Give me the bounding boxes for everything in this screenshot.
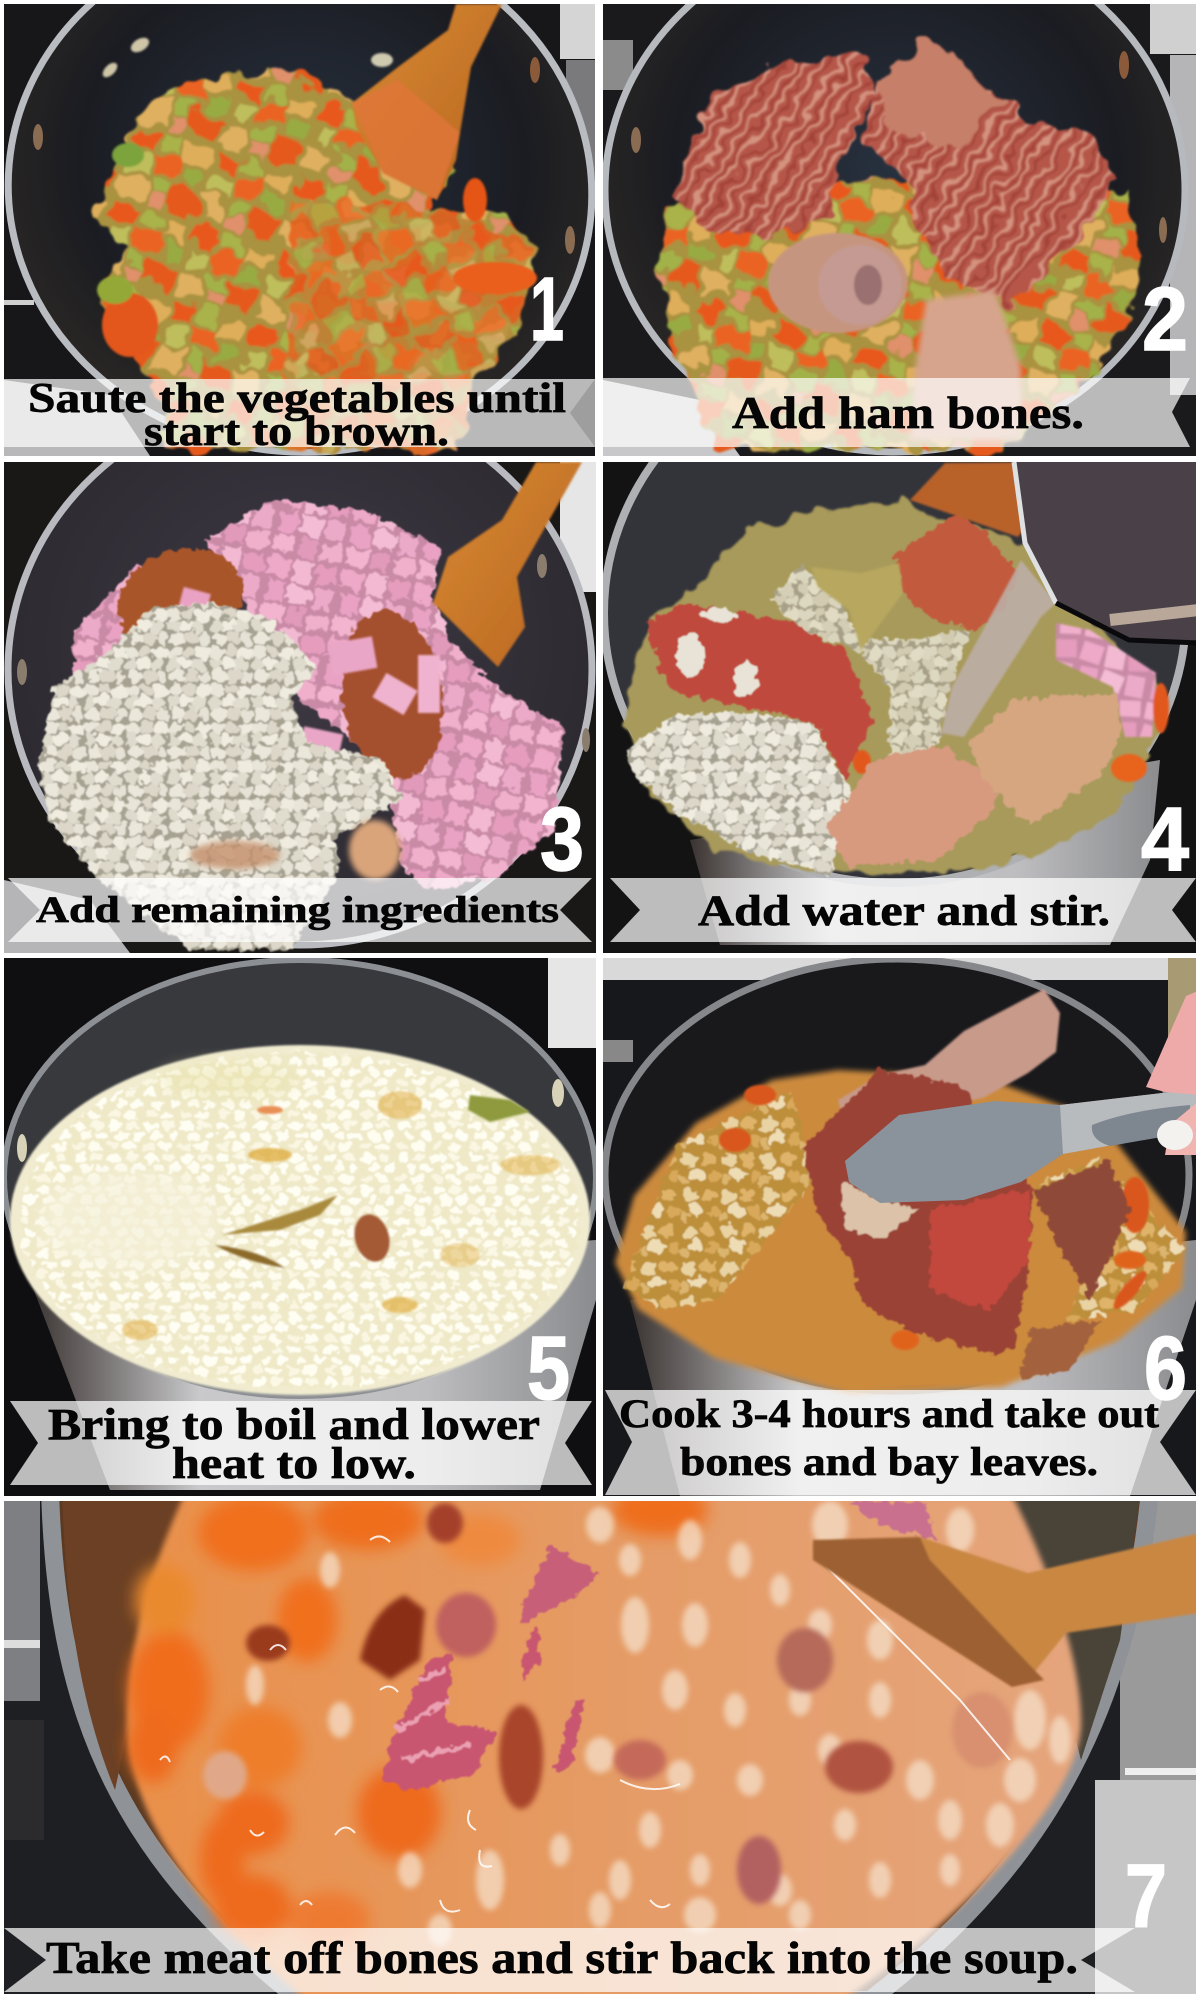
- caption text: Saute the vegetables until: [28, 376, 566, 422]
- food: right ham bone: [861, 38, 1115, 307]
- caption text: Cook 3-4 hours and take out: [619, 1391, 1160, 1436]
- pot: [605, 0, 1185, 452]
- icon: wooden spoon: [813, 1533, 1200, 1687]
- food: bone pieces: [190, 820, 401, 880]
- icon: wooden spoon: [433, 462, 582, 667]
- caption text: Add remaining ingredients: [36, 890, 559, 931]
- step number 7: 7: [1125, 1847, 1167, 1947]
- pot rivets: [17, 1079, 564, 1162]
- food: second trotter: [910, 290, 1021, 440]
- caption banner: [10, 1401, 592, 1485]
- food: vegetables: [96, 35, 537, 450]
- panel: step 2 add ham bones: [603, 0, 1196, 456]
- caption text: [48, 1400, 540, 1488]
- stove background: [4, 462, 596, 953]
- caption text: Take meat off bones and stir back into the soup.: [46, 1932, 1078, 1983]
- panel: step 3 add remaining ingredients: [4, 395, 596, 953]
- caption text: start to brown.: [144, 409, 449, 455]
- step number 1: 1: [530, 260, 564, 360]
- food: floating items: [122, 1091, 560, 1340]
- food: sausage: [116, 546, 446, 782]
- panel: step 7 finished soup: [4, 1484, 1200, 2000]
- food: left ham bone: [646, 603, 872, 780]
- step number 4: 4: [1141, 790, 1189, 890]
- stove and pot body: [4, 958, 596, 1496]
- caption text: bones and bay leaves.: [680, 1439, 1098, 1484]
- food: soup base: [127, 1495, 1081, 2000]
- icon: water stream: [941, 560, 1056, 737]
- food: meat: [803, 1070, 1130, 1380]
- stove background: [603, 4, 1196, 456]
- step number 6: 6: [1144, 1319, 1187, 1419]
- icon: hand: [1146, 990, 1200, 1155]
- pot: [0, 0, 614, 476]
- caption banner: [4, 1928, 1135, 1992]
- pot: [50, 1490, 1150, 2000]
- stove and pot body: [603, 462, 1196, 953]
- stove background: [4, 4, 595, 456]
- bubbles and highlights: [160, 1536, 1010, 1912]
- food: beans in boiling water: [10, 1045, 590, 1395]
- food: trotters: [826, 693, 1121, 867]
- food: sausage and dark meat: [203, 1503, 1012, 1904]
- food: bay leaf: [811, 563, 903, 650]
- caption text: Add water and stir.: [698, 888, 1110, 935]
- panel: step 4 add water: [603, 343, 1199, 953]
- food: vegetables: [661, 180, 1144, 450]
- pot: [4, 960, 596, 1396]
- caption text: [28, 376, 566, 455]
- stove background: [4, 1501, 1196, 1994]
- caption banner: [610, 878, 1196, 942]
- caption banner: [8, 878, 592, 942]
- step number 2: 2: [1142, 270, 1188, 370]
- food: white beans: [38, 603, 402, 950]
- caption text: [619, 1391, 1160, 1484]
- food: trotter: [768, 233, 908, 333]
- step number 5: 5: [527, 1319, 570, 1419]
- stove and pot body: [603, 958, 1196, 1496]
- caption text: heat to low.: [172, 1439, 416, 1488]
- caption banner: [603, 378, 1190, 447]
- food: soup: [615, 1070, 1186, 1394]
- caption banner: [4, 379, 595, 447]
- panel: step 6 cook and remove bones: [603, 958, 1200, 1496]
- panel: step 5 bring to boil: [4, 958, 596, 1496]
- pot: [4, 462, 596, 948]
- food: shredded ham: [383, 1502, 935, 1790]
- caption text: Bring to boil and lower: [48, 1400, 540, 1449]
- food: carrots: [128, 1484, 708, 1948]
- food: left ham bone: [669, 57, 876, 243]
- food: broth: [625, 503, 1167, 877]
- pot: [604, 343, 1186, 883]
- icon: wooden spoon: [910, 462, 1071, 537]
- food: white beans: [246, 1501, 1071, 1946]
- icon: wooden spoon: [352, 4, 502, 200]
- food: bean clusters: [627, 565, 970, 877]
- step number 3: 3: [540, 790, 584, 890]
- food: rib bone: [838, 989, 1060, 1125]
- panel: step 1 saute vegetables: [0, 0, 614, 476]
- icon: tongs: [845, 1089, 1196, 1203]
- food: top ham bone: [895, 510, 1018, 630]
- caption text: Add ham bones.: [732, 387, 1084, 438]
- food: ham and carrots: [853, 623, 1169, 782]
- pot: [605, 959, 1189, 1391]
- food: ham cubes: [73, 500, 563, 890]
- caption banner: [605, 1390, 1196, 1495]
- icon: glass pitcher: [1014, 462, 1199, 643]
- food: ham pieces on sausage: [177, 587, 440, 770]
